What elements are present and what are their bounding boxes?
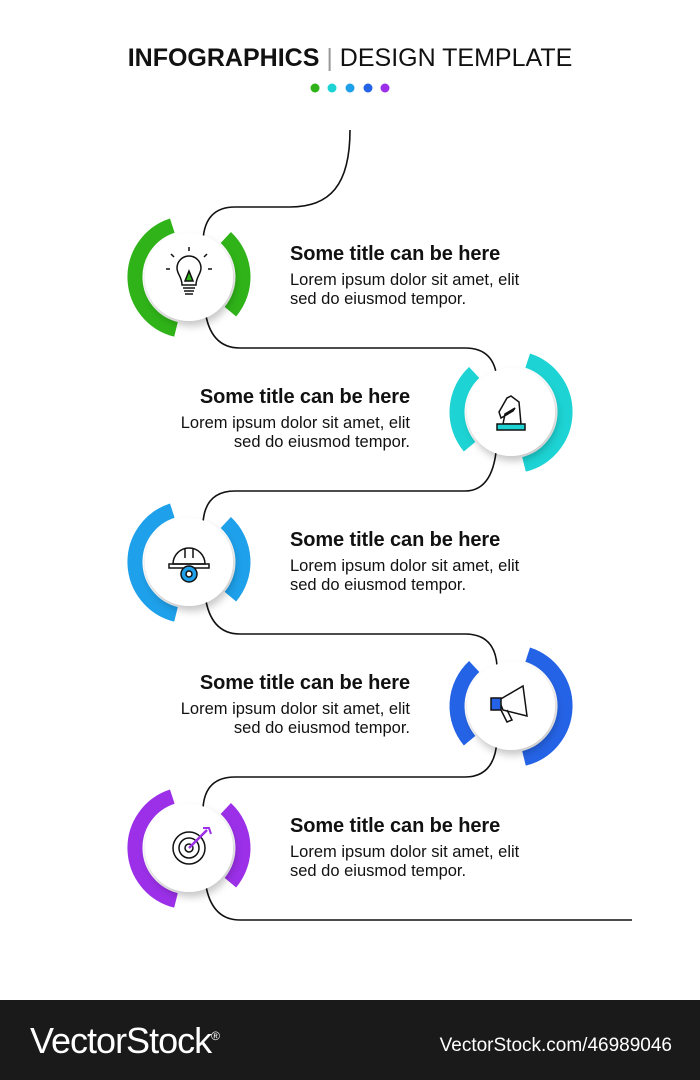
text 3: sed do eiusmod tempor. xyxy=(290,576,466,594)
text 4: Lorem ipsum dolor sit amet, elit xyxy=(181,700,410,718)
step 4 circle xyxy=(457,655,565,758)
text 5 xyxy=(290,815,520,880)
text 1: Lorem ipsum dolor sit amet, elit xyxy=(290,271,519,289)
text 5: Some title can be here xyxy=(290,815,500,837)
text 5: Lorem ipsum dolor sit amet, elit xyxy=(290,843,519,861)
title: INFOGRAPHICS | DESIGN TEMPLATE xyxy=(128,44,572,72)
title dots xyxy=(310,84,390,92)
footer bar xyxy=(0,1000,700,1080)
text 1: Some title can be here xyxy=(290,243,500,265)
step 5 circle xyxy=(135,797,243,900)
text 1: sed do eiusmod tempor. xyxy=(290,290,466,308)
step 2 circle xyxy=(457,361,565,464)
text 3 xyxy=(290,529,520,594)
text 2 xyxy=(181,386,410,451)
icon: chess knight xyxy=(497,396,525,430)
text 3: Lorem ipsum dolor sit amet, elit xyxy=(290,557,519,575)
footer bar: VectorStock® xyxy=(30,1020,219,1061)
icon: megaphone xyxy=(491,686,527,722)
footer bar: VectorStock.com/46989046 xyxy=(440,1035,672,1056)
text 5: sed do eiusmod tempor. xyxy=(290,862,466,880)
icon: target xyxy=(173,828,211,864)
text 4: Some title can be here xyxy=(200,672,410,694)
text 4 xyxy=(181,672,410,737)
text 3: Some title can be here xyxy=(290,529,500,551)
text 2: Some title can be here xyxy=(200,386,410,408)
icon: helmet gear xyxy=(169,548,209,582)
connector line xyxy=(203,130,632,920)
text 1 xyxy=(290,243,520,308)
text 2: sed do eiusmod tempor. xyxy=(234,433,410,451)
icon: bulb xyxy=(166,247,212,294)
step 3 circle xyxy=(135,511,243,614)
text 4: sed do eiusmod tempor. xyxy=(234,719,410,737)
text 2: Lorem ipsum dolor sit amet, elit xyxy=(181,414,410,432)
step 1 circle xyxy=(135,226,243,329)
